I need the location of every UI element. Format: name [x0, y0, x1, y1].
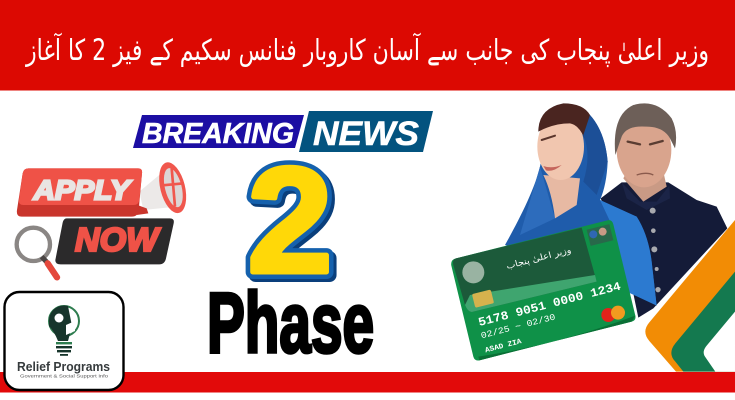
card title: وزیر اعلیٰ پنجاب [505, 246, 572, 272]
apply now graphic [17, 159, 191, 277]
jacket buttons [650, 208, 661, 292]
woman portrait [505, 103, 657, 306]
credit card [451, 220, 636, 361]
megaphone [137, 159, 191, 216]
news label [299, 111, 433, 153]
red footer bar [0, 372, 735, 392]
card dates: 02/25 ~ 02/30 [480, 312, 557, 341]
now button [55, 218, 174, 264]
card portraits [587, 224, 613, 246]
orange and green chevron [645, 220, 735, 372]
magnifying glass [17, 228, 57, 277]
apply button [17, 168, 142, 217]
breaking news badge [133, 111, 433, 153]
card holder: ASAD ZIA [484, 338, 523, 355]
man portrait [601, 103, 727, 318]
mastercard logo [601, 306, 625, 322]
card number: 5178 9051 0000 1234 [477, 280, 622, 330]
number 2: 2 [247, 137, 333, 305]
news label: NEWS [313, 115, 419, 153]
apply button: APPLY [33, 174, 133, 205]
logo name: Relief Programs [17, 360, 110, 374]
breaking label: BREAKING [142, 118, 294, 150]
card chip [472, 290, 494, 308]
now button: NOW [75, 222, 161, 259]
number 2: 2 [250, 140, 336, 308]
number 2: 2 [247, 137, 333, 305]
phase label: Phase [207, 276, 374, 371]
card seal [462, 261, 484, 283]
red header banner [0, 0, 735, 90]
icon: light bulb with reader [49, 305, 79, 356]
card photo area [453, 228, 597, 312]
relief programs logo [4, 292, 124, 390]
right photo group [451, 103, 735, 372]
logo tagline: Government & Social Support Info [20, 374, 109, 378]
